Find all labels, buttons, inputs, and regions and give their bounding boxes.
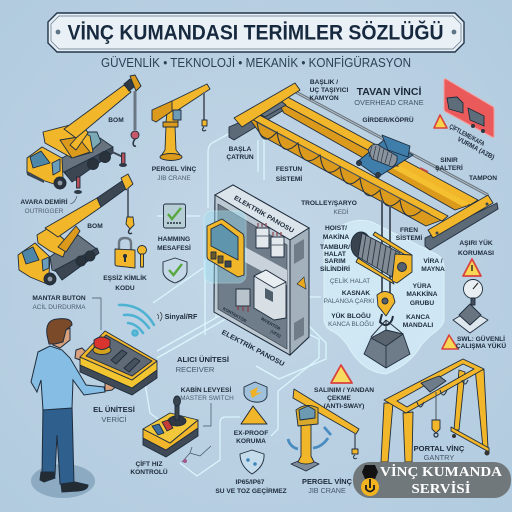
icon: wifi signal — [119, 305, 154, 336]
label: el unitesi: VERİCİ — [101, 415, 127, 424]
label: pergel vinc bottom — [302, 477, 353, 495]
label: yura: YÜRA — [413, 281, 432, 290]
badge: vinc kumanda servisi: SERVİSİ — [412, 481, 470, 496]
icon: padlock and key — [115, 238, 146, 268]
label: alici unitesi — [176, 355, 229, 374]
load block — [364, 334, 410, 368]
label: portal vinc — [414, 444, 465, 462]
icon: hamming check box — [164, 204, 186, 228]
label: festun: SİSTEMİ — [276, 175, 302, 183]
front girder side — [248, 117, 442, 226]
label: portal vinc: PORTAL VİNÇ — [414, 444, 465, 453]
back girder — [277, 101, 470, 210]
label: elektrik panosu bottom: ELEKTRİK PANOSU — [220, 328, 286, 368]
label: basla catrun: BAŞLA — [229, 146, 252, 153]
keypad display unit — [204, 211, 246, 283]
label: pergel vinc bottom: PERGEL VİNÇ — [302, 477, 353, 486]
hoist glow panel — [324, 220, 444, 374]
din rail — [245, 247, 287, 285]
panel label top: ELEKTRİK PANOSU — [233, 193, 296, 235]
label: tavan vinci — [354, 85, 424, 107]
label: tambur: SİLİNDİRİ — [320, 265, 350, 273]
label: alici unitesi: ALICI ÜNİTESİ — [177, 355, 229, 364]
contactor small — [236, 289, 250, 312]
mobile crane 2 — [18, 174, 134, 285]
badge: vinc kumanda servisi — [353, 462, 511, 498]
overload gauge — [442, 259, 506, 350]
mobile crane 1 — [27, 75, 141, 194]
label: tavan vinci: TAVAN VİNCİ — [357, 85, 421, 98]
gantry crane — [381, 359, 490, 462]
label: trolley: TROLLEY/ŞARYO — [301, 200, 357, 207]
inverter — [254, 270, 286, 320]
label: kasnak: PALANGA ÇARKI — [324, 298, 375, 305]
label: girder: GİRDER/KÖPRÜ — [362, 115, 414, 124]
label: fren: SİSTEMİ — [396, 234, 422, 242]
label: hoist: HOIST/ — [325, 225, 347, 232]
label: kabin levyesi: MASTER SWITCH — [180, 395, 234, 402]
label: basla catrun — [226, 146, 254, 161]
rotation arrows — [288, 427, 331, 449]
label: baslik: UÇ TAŞIYICI — [310, 87, 349, 94]
label: essiz kimlik kodu: KODU — [115, 285, 135, 292]
label: ip65: IP65/IP67 — [236, 479, 265, 486]
label: alici unitesi: RECEIVER — [176, 365, 215, 374]
label: vira — [421, 257, 445, 273]
label: festun: FESTUN — [276, 166, 302, 173]
label: swl: ÇALIŞMA YÜKÜ — [456, 341, 506, 350]
label: ex-proof: EX-PROOF — [234, 430, 268, 437]
label: anti-sway — [314, 387, 374, 410]
labels: hoist area — [320, 225, 445, 329]
label: hamming mesafesi: HAMMING — [158, 236, 190, 243]
icon: shield check — [163, 258, 187, 283]
label: kabin levyesi: KABİN LEVYESİ — [181, 386, 231, 394]
label: outrigger: OUTRIGGER — [25, 208, 64, 215]
label: el unitesi: EL ÜNİTESİ — [93, 405, 135, 414]
label: essiz kimlik kodu: EŞSİZ KİMLİK — [103, 274, 147, 282]
labels: overhead crane area — [276, 79, 497, 257]
label: anti-sway: ÇEKME — [327, 395, 352, 402]
label: yura: GRUBU — [410, 300, 434, 307]
left end tie — [234, 83, 300, 127]
label: festun — [276, 166, 302, 183]
pulley — [377, 292, 395, 316]
warning sign: double block — [434, 79, 495, 161]
label: tambur: SARIM — [324, 258, 346, 265]
label: tambur: TAMBUR/ — [320, 244, 350, 251]
label: outrigger — [20, 198, 68, 215]
label: kanca mandali: KANCA — [406, 314, 430, 321]
trolley — [356, 135, 413, 178]
label: ciftleme: ÇİFTLEME/KAFA — [448, 123, 486, 148]
label: ex-proof: KORUMA — [236, 438, 266, 445]
electrical panel: İNVERTÖR — [260, 316, 281, 331]
label: baslik: KAMYON — [309, 95, 339, 102]
label: sinir salteri: ŞALTERİ — [435, 164, 463, 172]
label: swl — [456, 334, 506, 350]
label: pergel vinc bottom: JIB CRANE — [308, 486, 346, 495]
label: hamming mesafesi — [157, 236, 191, 252]
label: yuk blogu: YÜK BLOĞU — [331, 311, 371, 320]
label: outrigger: AVARA DEMİRİ — [20, 198, 68, 206]
limit switch — [420, 168, 428, 172]
label: el unitesi — [93, 405, 135, 424]
label: kabin levyesi — [180, 386, 234, 402]
label: portal vinc: GANTRY — [424, 453, 454, 462]
label: yura: MAKKİNA — [406, 290, 438, 298]
label: ip65: SU VE TOZ GEÇİRMEZ — [215, 487, 287, 495]
label: kasnak — [324, 290, 375, 305]
electrical panel: (VFD) — [270, 329, 282, 339]
right end rail — [425, 203, 498, 250]
label: pergel vinc top: PERGEL VİNÇ — [152, 165, 197, 173]
label: mantar buton: MANTAR BUTON — [32, 295, 86, 302]
label: fren — [396, 227, 422, 242]
hook and slings — [380, 314, 393, 325]
label: tambur: HALAT — [324, 251, 346, 258]
label: ciftleme: VURMA (A2B) — [456, 136, 495, 161]
label: pergel vinc top: JIB CRANE — [157, 175, 191, 182]
label: asiri yuk — [458, 238, 494, 257]
label: kasnak: KASNAK — [342, 290, 370, 297]
festoon cables — [257, 122, 422, 216]
label: kanca mandali: MANDALI — [403, 322, 433, 329]
icon: ex warning — [241, 406, 267, 424]
label: kanca mandali — [403, 314, 433, 329]
title plaque — [48, 13, 464, 52]
handset: el unitesi — [80, 331, 157, 395]
label: swl: SWL: GÜVENLİ — [457, 334, 505, 343]
operator — [31, 319, 120, 498]
label: cift hiz: KONTROLÜ — [130, 467, 168, 476]
label: hoist: MAKİNA — [323, 233, 349, 241]
jib crane top — [152, 84, 210, 160]
label: vira: VİRA / — [423, 257, 443, 265]
left rail — [229, 104, 284, 140]
label: sinir salteri — [435, 157, 463, 172]
label: baslik: BAŞLIK / — [310, 79, 338, 86]
label: yuk blogu: KANCA BLOĞU — [328, 319, 374, 328]
icon: badge hook — [361, 465, 379, 496]
subtitle: GÜVENLİK • TEKNOLOJİ • MEKANİK • KONFİGÜRASYON — [101, 56, 411, 70]
label: baslik — [309, 79, 349, 102]
label: fren: FREN — [400, 227, 418, 234]
label: essiz kimlik kodu — [103, 274, 147, 292]
label: yura — [406, 281, 438, 307]
label: hoist — [323, 225, 349, 241]
label: sinyal rf: Sinyal/RF — [165, 312, 198, 321]
hoist machine — [351, 200, 412, 368]
connecting plate — [258, 101, 286, 117]
badge text: VİNÇ KUMANDA — [380, 464, 502, 479]
front girder top — [248, 111, 448, 221]
label: tavan vinci: OVERHEAD CRANE — [354, 98, 424, 107]
label: pergel vinc top — [152, 165, 197, 182]
icon: water shield — [240, 450, 264, 474]
label: sinir salteri: SINIR — [440, 157, 458, 164]
label: yuk blogu — [328, 311, 374, 328]
label: tambur — [320, 244, 350, 273]
label: BOM lower: BOM — [87, 223, 103, 230]
wiring: cyan connection lines — [145, 133, 326, 476]
master switch controller — [143, 396, 211, 463]
label: hamming mesafesi: MESAFESİ — [157, 244, 191, 252]
panel small labels: KONTAKTÖR — [222, 306, 247, 323]
electrical panel — [214, 185, 309, 355]
label: anti-sway: SALINIM / YANDAN — [314, 387, 374, 394]
label: cift hiz: ÇİFT HIZ — [135, 460, 163, 468]
icon: shield spark — [244, 382, 267, 402]
back rail — [292, 90, 488, 195]
label: trolley — [301, 200, 357, 216]
label: vira: MAYNA — [421, 266, 445, 273]
label: asiri yuk: AŞIRI YÜK — [459, 238, 493, 247]
label: BOM top: BOM — [108, 117, 124, 124]
label: celik halat: ÇELİK HALAT — [330, 276, 370, 285]
label: trolley: KEDİ — [334, 207, 349, 216]
right end tie — [428, 195, 493, 238]
label: ip65 — [215, 479, 287, 495]
label: tampon: TAMPON — [469, 175, 497, 182]
label: mantar buton: ACİL DURDURMA — [32, 302, 86, 311]
icon: anti-sway warning — [331, 365, 352, 383]
label: asiri yuk: KORUMASI — [458, 250, 494, 257]
jib crane bottom — [288, 389, 359, 471]
label: mantar buton — [32, 295, 86, 311]
contactors — [256, 223, 284, 257]
label: anti-sway: (ANTI-SWAY) — [324, 403, 364, 410]
overhead crane — [229, 83, 498, 250]
title text: VİNÇ KUMANDASI TERİMLER SÖZLÜĞÜ — [68, 20, 444, 44]
label: ex-proof — [234, 430, 268, 445]
label: cift hiz — [130, 460, 168, 476]
label: basla catrun: ÇATRUN — [226, 154, 254, 161]
icon: small warning — [434, 115, 447, 128]
